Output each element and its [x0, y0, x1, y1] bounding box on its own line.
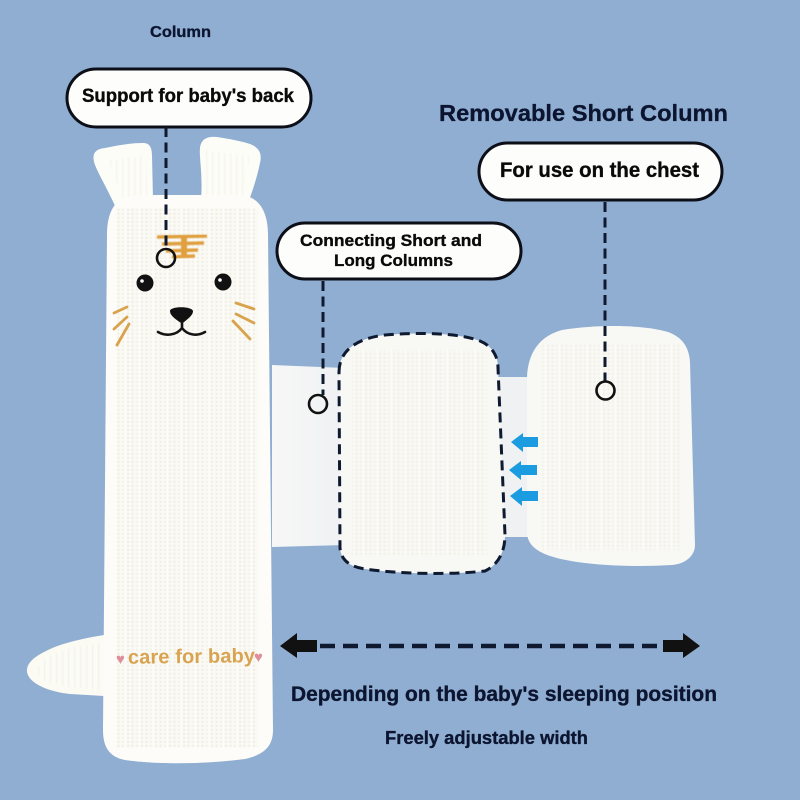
callout: support for baby's back — [67, 69, 311, 267]
short column left (dashed) — [339, 333, 505, 573]
callout: for use on the chest — [479, 143, 722, 400]
callout: connecting columns: Connecting Short and — [300, 231, 482, 250]
heading: column: Column — [150, 24, 211, 41]
callout: connecting columns — [277, 223, 521, 413]
product text: care for baby — [128, 645, 256, 669]
blue arrows — [509, 433, 538, 506]
product text: ♥ — [116, 651, 125, 668]
face: whiskers — [114, 303, 254, 345]
face: stripes — [157, 236, 207, 257]
callout: connecting columns: Long Columns — [334, 251, 453, 270]
ears — [93, 137, 261, 210]
face: nose and mouth — [158, 307, 205, 335]
short column right — [527, 326, 695, 566]
tail — [27, 635, 104, 696]
heading: removable short column: Removable Short Column — [439, 100, 728, 126]
callout: for use on the chest: For use on the chest — [500, 159, 699, 182]
callout: support for baby's back: Support for baby's back — [82, 86, 294, 107]
caption: adjustable width: Freely adjustable width — [385, 728, 588, 748]
double arrow: width — [280, 633, 700, 658]
long column pillow — [103, 195, 273, 763]
product text: ♥ — [254, 649, 263, 666]
face: eyes — [136, 274, 232, 292]
caption: sleeping position: Depending on the baby's sleeping position — [291, 683, 717, 706]
connecting strap — [272, 365, 532, 547]
